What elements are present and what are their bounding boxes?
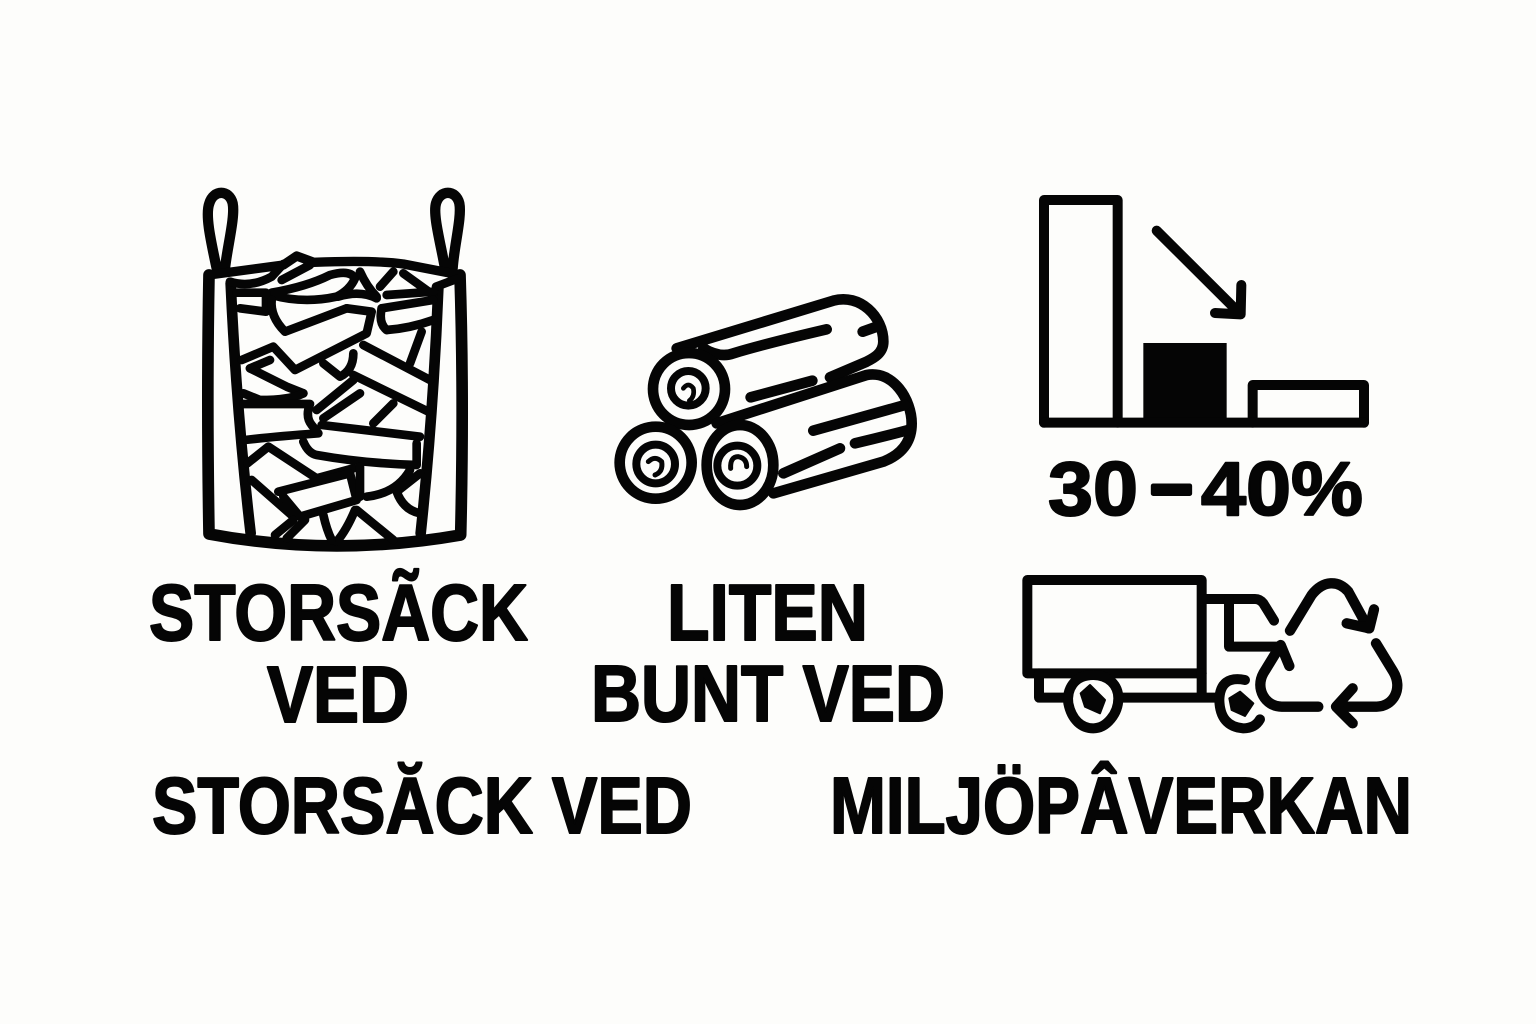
value: reduction percentage: 30 bbox=[1048, 447, 1138, 532]
label: STORSĂCK VED bottom caption: STORSĂCK VED bbox=[152, 761, 692, 850]
icon: lower right log end bbox=[707, 425, 773, 505]
label: STORSÃCK VED two-line caption: VED bbox=[267, 650, 409, 739]
icon: upper log bbox=[653, 299, 883, 425]
label: LITEN BUNT VED two-line caption: BUNT VED bbox=[591, 649, 945, 738]
icon: bag lifting loops bbox=[208, 193, 460, 268]
icon: firewood pieces in bag bbox=[230, 264, 433, 542]
chart baseline bbox=[1044, 408, 1364, 438]
icon: truck with recycling symbol bbox=[1027, 580, 1397, 728]
icon: bulk bag of firewood bbox=[208, 193, 462, 546]
icon: lower right log bbox=[717, 374, 912, 493]
label: LITEN BUNT VED two-line caption: LITEN bbox=[667, 568, 868, 657]
icon: bag outline bbox=[208, 256, 462, 546]
value: reduction percentage bbox=[1048, 442, 1363, 532]
label: LITEN BUNT VED two-line caption bbox=[591, 568, 945, 738]
value: reduction percentage: 40% bbox=[1201, 447, 1363, 532]
icon: lower left log end bbox=[620, 427, 692, 499]
icon: truck bbox=[1027, 580, 1280, 728]
label: STORSÃCK VED two-line caption: STORSÃCK bbox=[149, 568, 528, 657]
bar: short outlined bbox=[1253, 385, 1364, 423]
bar: tall outlined bbox=[1044, 200, 1118, 423]
icon: recycling arrows bbox=[1260, 583, 1397, 723]
label: STORSÃCK VED two-line caption bbox=[149, 568, 528, 739]
bar: filled bbox=[1143, 343, 1227, 423]
label: MILJÖPÂVERKAN bottom caption: MILJÖPÂVERKAN bbox=[830, 761, 1412, 850]
value: reduction percentage: – bbox=[1151, 442, 1192, 527]
icon: small bundle of logs bbox=[620, 299, 912, 505]
chart: falling bars with arrow bbox=[1044, 200, 1364, 423]
arrow: downward trend bbox=[1157, 231, 1241, 314]
